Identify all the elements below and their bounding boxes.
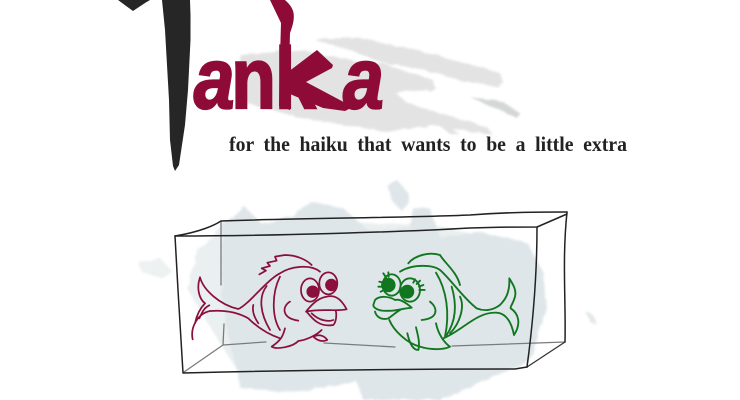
- body stripes: [436, 273, 462, 337]
- tail and body outline: [198, 267, 320, 309]
- watercolor wash behind tank: [137, 180, 597, 400]
- lower fin: [313, 335, 327, 341]
- tank front and top edges: [175, 212, 567, 373]
- title letters anka: a: [194, 30, 234, 126]
- glass tank: [175, 212, 567, 373]
- dorsal fin: [408, 254, 460, 285]
- dorsal fin: [259, 255, 312, 274]
- title letters anka: a: [343, 30, 384, 126]
- lower fin: [407, 327, 419, 350]
- tail and body outline: [400, 266, 518, 338]
- eyes: [301, 278, 319, 302]
- mouth: [306, 296, 347, 312]
- pectoral fin: [422, 302, 435, 320]
- eyelashes: [378, 272, 425, 292]
- lips: [373, 297, 412, 311]
- ink brush wash behind title: [236, 38, 520, 135]
- illustration: Tanka title and fish tank: [118, 0, 627, 400]
- title: Tanka: [118, 0, 383, 171]
- tagline: for the haiku that wants to be a little extra: [229, 132, 627, 156]
- title letters anka: n: [231, 30, 276, 126]
- eyes: [383, 274, 401, 296]
- red fish: [192, 255, 347, 348]
- green fish: [373, 254, 518, 350]
- tank back edges: [184, 221, 565, 372]
- body stripes: [253, 277, 280, 330]
- pectoral fin: [285, 302, 298, 321]
- title letters anka: [194, 0, 384, 126]
- title letters anka: k: [275, 30, 316, 126]
